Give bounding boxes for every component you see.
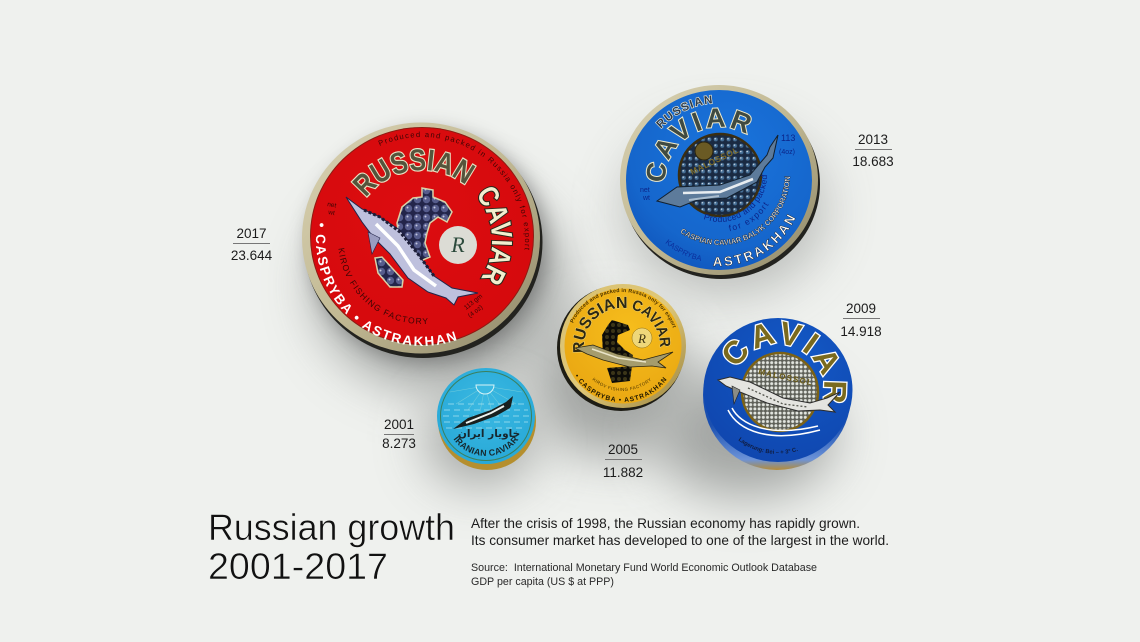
tin text: Iranian caviar: IRANIAN CAVIAR (454, 436, 518, 456)
label: 2013: 2013 (858, 132, 888, 147)
weight labels (327, 201, 484, 320)
water (443, 404, 529, 428)
source note: GDP per capita (US $ at PPP) (471, 576, 614, 588)
weight labels: net (640, 187, 650, 194)
tin text: Astrakhan: ASTRAKHAN (712, 214, 796, 266)
title: Russian growth (208, 507, 455, 548)
medallion: R (450, 232, 465, 257)
sturgeon (718, 377, 840, 412)
weight labels: wt (327, 209, 335, 217)
tin text: Caspryba Astrakhan: • CASPRYBA • ASTRAKHAN (316, 223, 456, 346)
tin text: Caviar: CAVIAR (632, 300, 671, 348)
white arcs (728, 408, 820, 436)
tin text: storage note: Lagerung: Bei – + 3° C. (738, 437, 798, 454)
sun and rays (450, 385, 522, 412)
description: After the crisis of 1998, the Russian economy has rapidly grown. (471, 515, 860, 531)
caviar clusters (602, 320, 633, 360)
caviar disc (679, 134, 761, 216)
label: 2001: 8.273 (382, 436, 416, 451)
label: 2005: 11.882 (603, 465, 643, 480)
caviar disc (742, 353, 818, 431)
weight labels: 113 gm (463, 293, 484, 312)
label: 2005: 2005 (608, 442, 638, 457)
weight labels: net (327, 201, 337, 210)
title (208, 507, 455, 587)
label: 2013: 18.683 (852, 154, 894, 169)
tin text: produced and packed: Produced and packed in Russia only for export (570, 288, 676, 328)
weight labels: (4oz) (779, 149, 795, 156)
tin text: Russian: RUSSIAN (572, 296, 627, 353)
tin text: Kirov fishing factory: KIROV FISHING FACTORY (592, 378, 650, 391)
tin text: Russian: RUSSIAN (655, 94, 713, 129)
malossol label: MALOSSOL (758, 367, 814, 388)
label: 2009 (840, 301, 882, 339)
tin: 2001 teal Iranian caviar (437, 368, 536, 470)
tin text: Caspryba Astrakhan: • CASPRYBA • ASTRAKHAN (576, 374, 666, 402)
tin: 2017 red Russian caviar (298, 119, 557, 371)
caviar cluster (397, 188, 452, 262)
weight labels (640, 133, 795, 202)
tin text: Russian: RUSSIAN (350, 148, 477, 198)
sturgeon (657, 135, 778, 207)
tin text: Kirov fishing factory: KIROV FISHING FACTORY (338, 248, 428, 324)
sturgeon (346, 197, 478, 305)
weight labels: (4 oz) (467, 304, 484, 320)
tin text: Kaspryba: KASPRYBA (666, 239, 701, 261)
tin: 2013 blue Russian caviar (620, 85, 820, 279)
label: 2009: 2009 (846, 301, 876, 316)
sturgeon (575, 345, 673, 368)
title: 2001-2017 (208, 546, 388, 587)
label: 2001 (382, 417, 416, 451)
malossol label: MALOSSOL (688, 145, 740, 177)
weight labels: 113 (781, 133, 795, 143)
label: 2013 (852, 132, 894, 169)
label: 2001: 2001 (384, 417, 414, 432)
medallion (439, 226, 477, 264)
description: Its consumer market has developed to one of the largest in the world. (471, 532, 889, 548)
label: 2017: 23.644 (231, 248, 273, 263)
source note: Source: International Monetary Fund World Economic Outlook Database (471, 562, 817, 574)
label: 2005 (603, 442, 643, 480)
tin text: Caviar: CAVIAR (646, 107, 752, 182)
tin text: produced and packed: for export (728, 202, 769, 232)
description (471, 515, 889, 548)
tin text: Caviar: CAVIAR (722, 320, 848, 404)
tin: 2005 yellow Russian caviar (557, 284, 686, 411)
weight labels: wt (642, 195, 650, 202)
label: 2017 (231, 226, 273, 263)
label: 2009: 14.918 (840, 324, 882, 339)
tin text: produced and packed: Produced and packed (704, 175, 767, 222)
sturgeon (453, 396, 513, 429)
medallion: R (637, 331, 646, 346)
tin text: Persian: خاویار ایران (458, 428, 520, 440)
tin text: produced and packed (680, 175, 790, 246)
soft shadows under tins (315, 125, 835, 497)
source note (471, 562, 817, 588)
tin text: Caviar: CAVIAR (478, 186, 514, 286)
tin: 2009 blue caviar (703, 318, 852, 470)
tin text: produced and packed: Produced and packed in Russia only for export (378, 132, 530, 250)
label: 2017: 2017 (236, 226, 267, 241)
tin text: corporation: CASPIAN CAVIAR BALYK CORPORATION (680, 176, 790, 246)
